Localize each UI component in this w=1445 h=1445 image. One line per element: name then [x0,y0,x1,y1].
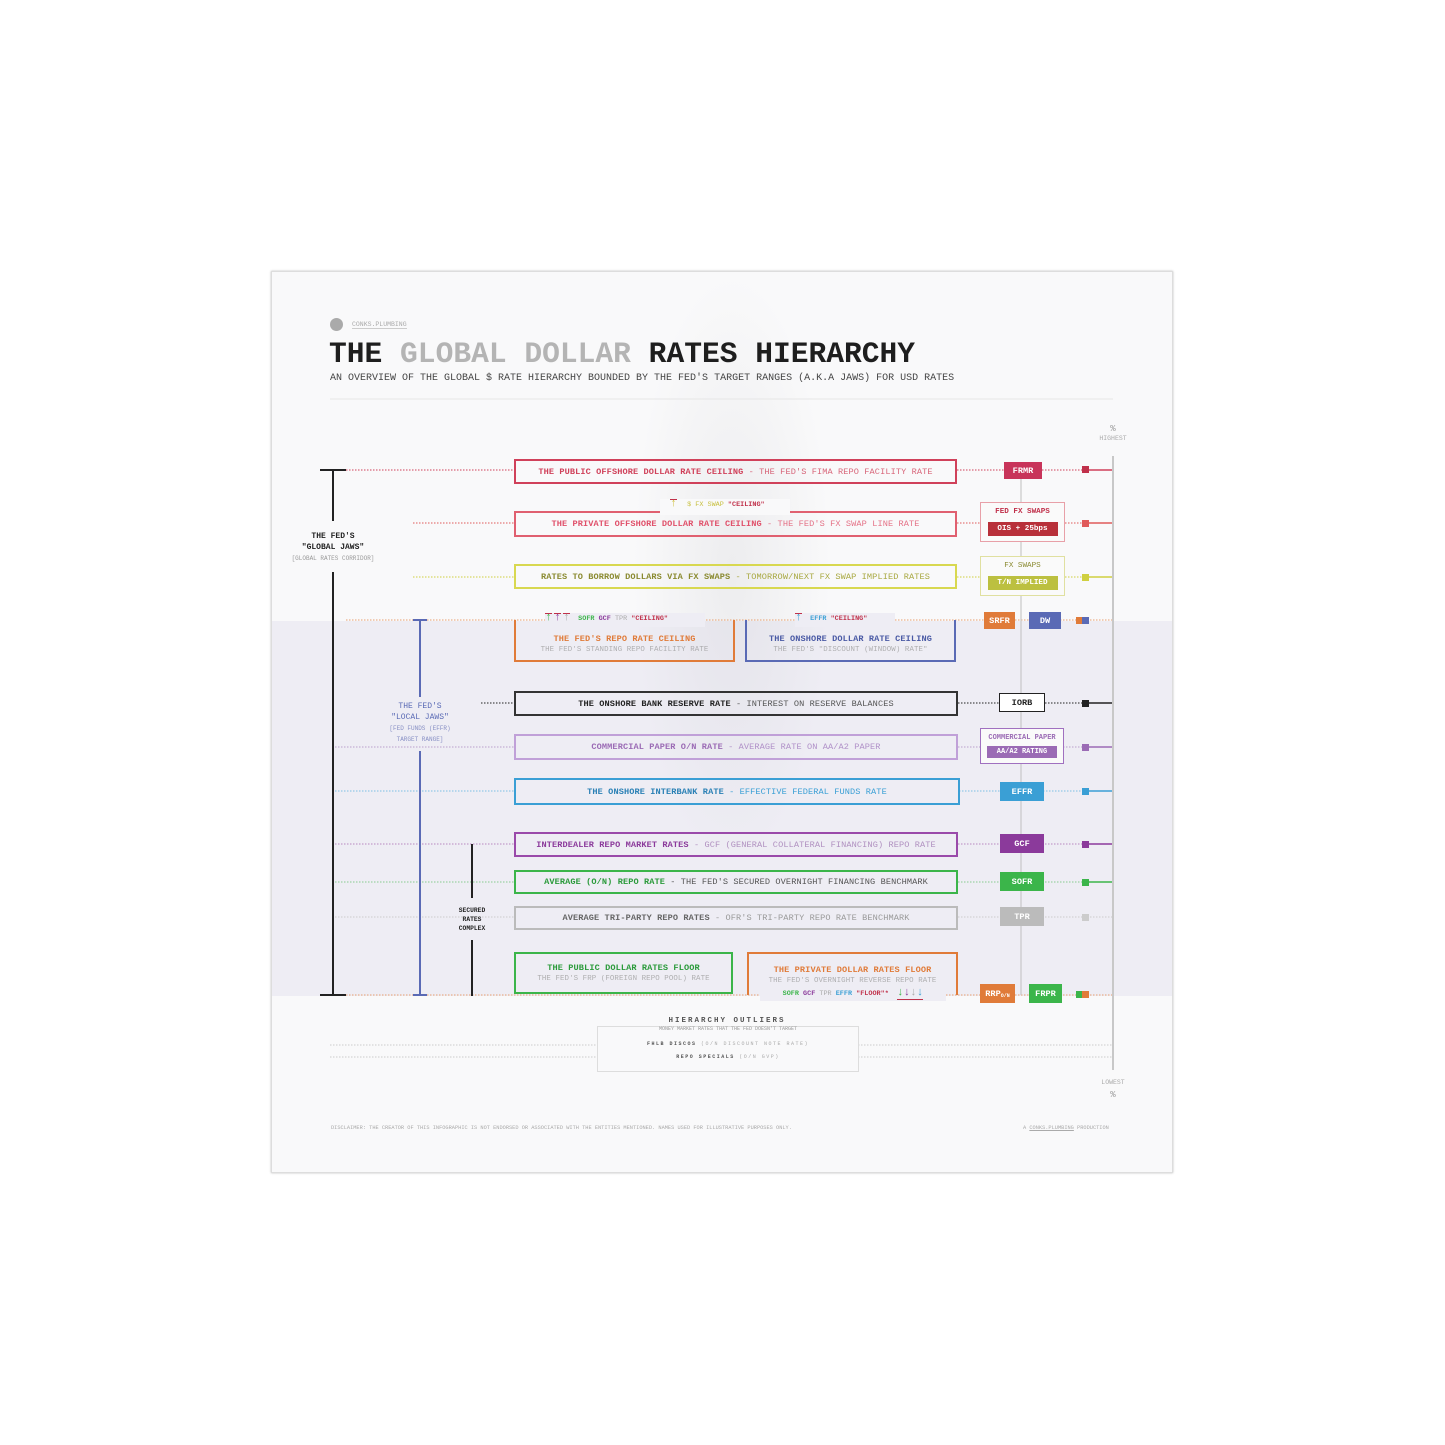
row: IORB [514,691,958,716]
bracket: secured rates complex: COMPLEX [459,925,485,932]
bracket: secured rates complex: SECURED [459,907,485,914]
badge FED FX SWAPS: OIS + 25bps [997,525,1048,533]
label: EFFR ceiling: ↑ [795,612,802,624]
badge SRFR: SRFR [989,616,1010,626]
row: SRF ceiling: THE FED'S REPO RATE CEILING [554,634,695,644]
row: public floor: THE FED'S FRP (FOREIGN REPO POOL) RATE [537,975,710,983]
badge FED FX SWAPS: FED FX SWAPS [995,508,1050,516]
row: private floor: THE FED'S OVERNIGHT REVERSE REPO RATE [769,977,936,985]
bracket: secured rates complex [458,844,486,996]
label: SOFR GCF TPR ceiling: SOFR GCF TPR "CEILING" [578,615,668,623]
bracket: local jaws [389,619,451,996]
bracket: local jaws: "LOCAL JAWS" [391,713,449,722]
badge TPR: TPR [1014,912,1030,922]
badge SOFR [1000,872,1044,891]
badge SOFR: SOFR [1012,876,1032,886]
row: private floor [747,952,958,995]
row: private floor: THE PRIVATE DOLLAR RATES FLOOR [774,965,931,975]
row: discount window ceiling: THE FED'S "DISCOUNT (WINDOW) RATE" [773,646,928,654]
badge FRMR [1004,462,1042,479]
row: FX swap line: THE PRIVATE OFFSHORE DOLLAR RATE CEILING - THE FED'S FX SWAP LINE RATE [551,519,920,529]
badge FX SWAPS: T/N IMPLIED [997,579,1048,587]
row: SOFR: AVERAGE (O/N) REPO RATE - THE FED'S SECURED OVERNIGHT FINANCING BENCHMARK [544,877,928,887]
background smoke silhouette [632,272,832,872]
panel: hierarchy outliers: FHLB DISCOS (O/N DISCOUNT NOTE RATE) [647,1041,809,1047]
row: TPR [514,906,958,930]
row: IORB: THE ONSHORE BANK RESERVE RATE - INTEREST ON RESERVE BALANCES [578,698,894,708]
bracket: secured rates complex: RATES [463,916,481,923]
panel: hierarchy outliers: HIERARCHY OUTLIERS [668,1017,786,1025]
row: FX swap implied [514,564,957,589]
row: EFFR [514,778,960,805]
badge FX SWAPS [980,556,1065,596]
label: SOFR GCF TPR ceiling [545,613,705,627]
badge RRP: RRP [985,988,1001,998]
axis markers [1082,466,1089,473]
card [271,271,1173,1173]
footer: credit: A CONKS.PLUMBING PRODUCTION [1023,1125,1109,1131]
row: FX swap implied: RATES TO BORROW DOLLARS VIA FX SWAPS - TOMORROW/NEXT FX SWAP IMPLIED RATES [541,572,930,582]
badge FED FX SWAPS [980,502,1065,542]
badge commercial paper: AA/A2 RATING [997,748,1047,756]
badge IORB: IORB [1012,698,1032,708]
footer: disclaimer: DISCLAIMER: THE CREATOR OF THIS INFOGRAPHIC IS NOT ENDORSED OR ASSOCIATED WITH THE ENTITIES MENTIONED. NAMES USED FOR ILLUSTRATIVE PURPOSES ONLY. [331,1125,792,1131]
row: commercial paper: COMMERCIAL PAPER O/N RATE - AVERAGE RATE ON AA/A2 PAPER [591,742,881,752]
badge commercial paper: COMMERCIAL PAPER [988,734,1056,742]
axis: highest to lowest: % [1110,424,1116,434]
row: FX swap line [514,511,957,537]
label: SOFR GCF TPR ceiling: ↑ [563,612,570,624]
badge DW: DW [1040,616,1050,626]
row: GCF: INTERDEALER REPO MARKET RATES - GCF (GENERAL COLLATERAL FINANCING) REPO RATE [536,840,936,850]
label: fx swap ceiling: ↑ [670,498,677,510]
axis: highest to lowest: LOWEST [1101,1079,1125,1086]
badge TPR [1000,907,1044,926]
row: EFFR: THE ONSHORE INTERBANK RATE - EFFECTIVE FEDERAL FUNDS RATE [587,786,887,796]
axis: highest to lowest: HIGHEST [1099,435,1127,442]
header: brand [330,318,407,331]
label: SOFR GCF TPR ceiling: ↑ [554,612,561,624]
badge commercial paper [980,728,1064,764]
subtitle: AN OVERVIEW OF THE GLOBAL $ RATE HIERARCHY BOUNDED BY THE FED'S TARGET RANGES (A.K.A JAWS) FOR USD RATES [330,373,954,384]
row: SRF ceiling: THE FED'S STANDING REPO FACILITY RATE [541,646,708,654]
label: EFFR ceiling: EFFR "CEILING" [810,615,867,623]
row: FIMA ceiling: THE PUBLIC OFFSHORE DOLLAR RATE CEILING - THE FED'S FIMA REPO FACILITY RATE [538,466,933,476]
badge RRP: O/N [1001,993,1010,999]
bracket: global jaws: THE FED'S [311,532,355,541]
label: EFFR ceiling [795,613,895,627]
badge GCF [1000,834,1044,853]
label: floor: SOFR GCF TPR EFFR "FLOOR"* ↓↓↓↓ [783,987,923,999]
axis: highest to lowest [1099,424,1127,1100]
bracket: local jaws: THE FED'S [398,702,442,711]
label: SOFR GCF TPR ceiling: ↑ [545,612,552,624]
axis: highest to lowest: % [1110,1090,1116,1100]
header: brand: CONKS.PLUMBING [352,321,407,328]
label: fx swap ceiling: $ FX SWAP "CEILING" [687,501,765,509]
row: public floor [514,952,733,994]
badge SRFR [984,612,1015,629]
row: TPR: AVERAGE TRI-PARTY REPO RATES - OFR'S TRI-PARTY REPO RATE BENCHMARK [562,913,909,923]
lavender band: local jaws region [272,621,1172,996]
badge GCF: GCF [1014,838,1030,848]
panel: hierarchy outliers [597,1017,859,1072]
badge FX SWAPS: FX SWAPS [1004,562,1041,570]
badge EFFR [1000,782,1044,801]
bracket: global jaws: [GLOBAL RATES CORRIDOR] [292,555,374,562]
badge RRP [980,984,1015,1003]
title: THE GLOBAL DOLLAR RATES HIERARCHY [329,337,915,371]
badge FRPR: FRPR [1035,988,1056,998]
row: FIMA ceiling [514,459,957,484]
badge DW [1029,612,1061,629]
bracket: local jaws: TARGET RANGE] [397,736,443,743]
panel: hierarchy outliers: REPO SPECIALS (O/N GVP) [676,1054,780,1060]
badge FRMR: FRMR [1013,466,1033,476]
badge FRPR [1029,984,1062,1003]
badge EFFR: EFFR [1012,786,1032,796]
row: GCF [514,832,958,857]
bracket: global jaws: "GLOBAL JAWS" [302,543,364,552]
badge IORB [999,693,1045,712]
panel: hierarchy outliers: MONEY MARKET RATES THAT THE FED DOESN'T TARGET [659,1026,797,1032]
bracket: local jaws: [FED FUNDS (EFFR) [389,725,451,732]
row: public floor: THE PUBLIC DOLLAR RATES FLOOR [547,963,700,973]
bracket: global jaws [292,469,374,996]
row: discount window ceiling: THE ONSHORE DOLLAR RATE CEILING [769,634,932,644]
row: commercial paper [514,734,958,760]
row: discount window ceiling [745,620,956,662]
row: SOFR [514,870,958,894]
label: floor [760,987,946,1001]
label: fx swap ceiling [660,499,790,515]
row: SRF ceiling [514,620,735,662]
